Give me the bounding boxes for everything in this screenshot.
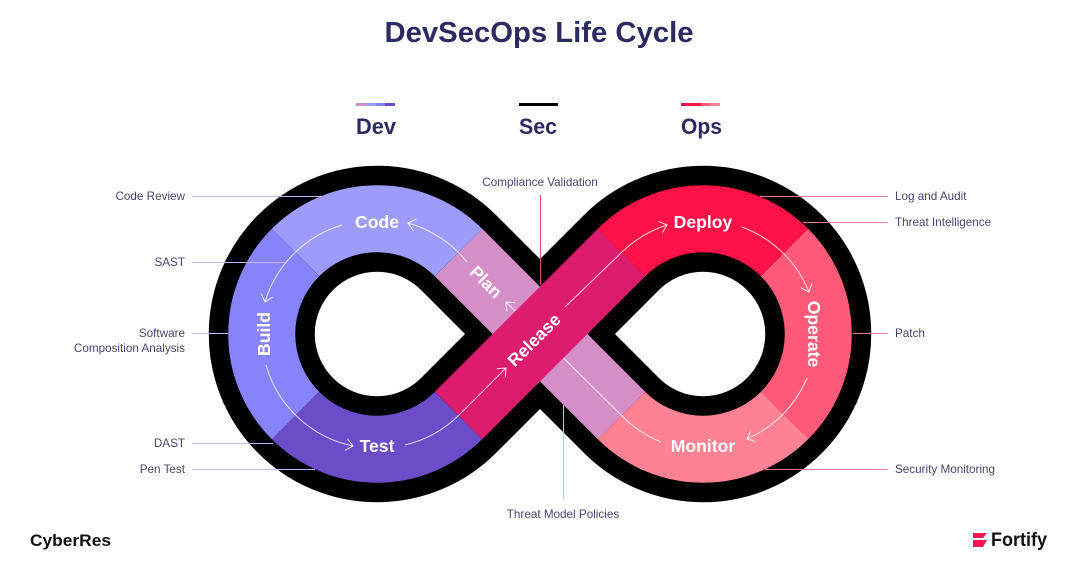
logo: Fortify: Fortify — [991, 530, 1047, 551]
segment: Plan and Monitor-side diagonal — [458, 252, 622, 416]
callout: SAST: SAST — [154, 256, 185, 269]
callout: Code Review: Code Review — [115, 190, 186, 203]
stage label: Plan: Plan — [466, 262, 506, 302]
segment: Test — [296, 416, 458, 449]
legend: Sec: Sec — [519, 114, 557, 139]
arrow: Operate to Monitor — [747, 378, 807, 439]
callout: DAST — [154, 437, 273, 450]
stage label: Deploy: Deploy — [674, 212, 733, 232]
callout: Pen Test: Pen Test — [140, 463, 186, 476]
segment: Operate — [784, 252, 818, 416]
stage label: Code: Code — [355, 212, 399, 232]
callout: Threat Model Policies: Threat Model Policies — [507, 508, 619, 521]
callout: Software Composition Analysis: Composition Analysis — [74, 342, 185, 355]
arrow: Test to Release — [405, 368, 506, 445]
segment: Deploy — [622, 219, 784, 252]
callout: Patch — [853, 327, 925, 340]
callout: Threat Model Policies — [507, 405, 619, 521]
stage label: Build: Build — [254, 312, 274, 356]
stage label: Operate: Operate — [804, 301, 824, 367]
legend: Dev — [356, 103, 397, 139]
callout: Compliance Validation: Compliance Validation — [482, 176, 598, 189]
arrow: Code to Build — [265, 225, 342, 302]
arrow: Release to Plan — [506, 302, 515, 311]
callout: Threat Intelligence: Threat Intelligence — [895, 216, 991, 229]
segment: Code — [296, 219, 458, 252]
callout: Security Monitoring: Security Monitoring — [895, 463, 995, 476]
callout: DAST: DAST — [154, 437, 185, 450]
icon: Fortify mark — [973, 533, 987, 547]
arrow: Release to Deploy — [565, 225, 667, 307]
legend — [356, 103, 722, 139]
stage label: Release: Release — [503, 309, 565, 371]
infinity loop diagram — [254, 212, 824, 456]
callout: Software Composition Analysis: Software — [139, 327, 185, 340]
callout: SAST — [154, 256, 285, 269]
logo: CyberRes: CyberRes — [30, 531, 111, 550]
title: DevSecOps Life Cycle — [384, 17, 694, 49]
segment: Monitor — [622, 416, 784, 449]
legend: Ops — [681, 103, 722, 139]
segment: Release — [458, 252, 622, 416]
callout: Software Composition Analysis — [74, 327, 228, 355]
legend: Sec — [519, 103, 558, 139]
stage label: Monitor: Monitor — [671, 436, 735, 456]
security outline: black infinity band — [262, 219, 818, 449]
legend: Ops: Ops — [681, 114, 722, 139]
segment: Build — [262, 252, 296, 416]
callout: Compliance Validation — [482, 176, 598, 285]
arrow: Build to Test — [266, 365, 353, 446]
arrow: Plan to Code — [408, 223, 467, 262]
arrow: Deploy to Operate — [742, 227, 809, 292]
line: Monitor to Release edge — [564, 358, 661, 442]
legend: Dev: Dev — [356, 114, 397, 139]
stage label: Test: Test — [360, 436, 395, 456]
callout: Patch: Patch — [895, 327, 925, 340]
callout: Log and Audit: Log and Audit — [895, 190, 967, 203]
